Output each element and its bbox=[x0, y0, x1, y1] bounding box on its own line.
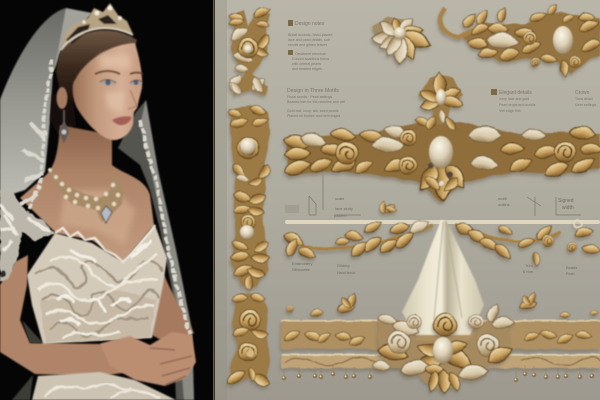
text block: middle right notes: Tiara detail bbox=[575, 97, 593, 101]
text block: top notes: Curved acanthus forms bbox=[292, 57, 329, 61]
text block: middle right notes: Ivory lace and gold bbox=[499, 97, 529, 101]
face highlights bbox=[100, 55, 130, 112]
panel: bride portrait bbox=[0, 0, 214, 400]
right arm bbox=[152, 272, 194, 345]
text block: top notes: and beaded edges bbox=[292, 67, 322, 71]
ornament: small sprig between notes bbox=[379, 202, 398, 215]
eyes, brows, lips and nose bbox=[95, 71, 143, 125]
text block: middle right notes: Crown bbox=[575, 90, 590, 96]
small diagram sketches bbox=[309, 175, 581, 216]
ornament: central medallion bbox=[418, 72, 464, 124]
text block: lower captions: Hand finish bbox=[337, 271, 355, 275]
text block: middle right notes: Elegant details bbox=[499, 90, 532, 96]
pearls set into the ornaments bbox=[240, 26, 573, 363]
veil lace trim bbox=[18, 60, 190, 335]
text block: middle left notes: Placed on bodice and hem edges bbox=[287, 114, 341, 118]
ornament: garlands under the rail bbox=[282, 218, 600, 266]
text block: middle right notes: Pearl drops and scrolls bbox=[499, 103, 536, 107]
text block: lower captions: outline bbox=[498, 202, 511, 207]
text block: lower captions bbox=[285, 196, 577, 276]
ornament: lower ribbon bands bbox=[281, 291, 600, 368]
drapery bbox=[402, 220, 484, 335]
shoulder lace bbox=[0, 190, 55, 282]
text block: middle left notes: Gold leaf, ivory, silk, seed pearls bbox=[287, 109, 339, 113]
text block: lower captions: scale bbox=[335, 196, 345, 201]
ornament: small top brooch bbox=[371, 15, 434, 65]
text block: middle right notes bbox=[491, 89, 596, 113]
text block: top notes: Ornament structure bbox=[295, 52, 326, 56]
text block: lower captions: Silhouette bbox=[292, 267, 311, 272]
ornament: cream rail bbox=[285, 220, 600, 224]
ornament: central horizontal band bbox=[283, 114, 600, 202]
tiara bbox=[61, 3, 133, 50]
text block: top notes: Bridal accents, hand-placed bbox=[288, 33, 332, 37]
text block: middle left notes: Design in Three Motifs bbox=[287, 88, 339, 94]
necklace bbox=[48, 168, 124, 223]
text block: middle right notes: Veil edge trim bbox=[499, 109, 521, 113]
veil behind arm bbox=[12, 320, 43, 400]
text block: lower captions: Embroidery bbox=[292, 261, 312, 266]
text block: lower captions: motif bbox=[498, 196, 508, 201]
text block: lower captions: lace study bbox=[335, 206, 353, 211]
veil bbox=[0, 8, 194, 400]
text block: top notes: lace and pearl details, soft bbox=[288, 38, 330, 42]
text block: lower captions: pattern bbox=[334, 213, 346, 218]
text block: lower captions: Pearl bbox=[566, 272, 575, 276]
panel: ornament sheet background bbox=[215, 0, 600, 400]
face bbox=[73, 43, 142, 140]
collarbone highlight bbox=[60, 190, 135, 245]
text block: lower captions: width bbox=[562, 205, 574, 211]
text block: lower captions: 6 mm bbox=[523, 269, 534, 274]
text block: top notes: with central pearls bbox=[292, 62, 321, 66]
dress bodice bbox=[27, 225, 167, 344]
ornament: hanging beads bbox=[282, 365, 594, 382]
text block: top notes bbox=[288, 20, 332, 71]
text block: middle left notes: Beaded trim for the neckline and veil bbox=[287, 100, 345, 104]
ornament: left column top bbox=[226, 5, 272, 97]
hair bbox=[56, 30, 137, 102]
text block: lower captions: Signed bbox=[558, 198, 574, 204]
text block: middle left notes bbox=[287, 88, 345, 118]
text block: lower captions: Trim bbox=[525, 263, 534, 268]
text block: top notes: Design notes bbox=[295, 21, 325, 27]
text block: middle right notes: Gem settings bbox=[575, 103, 596, 107]
ornament: top right flourish bbox=[440, 3, 600, 77]
earring bbox=[59, 110, 69, 143]
neck and shoulders bbox=[20, 125, 154, 262]
hands bbox=[100, 332, 196, 386]
text block: lower captions: Beads bbox=[566, 265, 577, 270]
text block: top notes: scrolls and gilded leaves bbox=[288, 43, 327, 47]
ornament: lower central flourish bbox=[371, 301, 515, 394]
ornament: left column bottom bbox=[225, 293, 272, 389]
text block: middle left notes: Floral scrolls · Pearl settings bbox=[287, 95, 332, 99]
dress skirt bbox=[32, 372, 176, 400]
left arm bbox=[0, 255, 130, 376]
text block: lower captions: Gilding bbox=[337, 263, 349, 268]
ornament: left column middle bbox=[227, 103, 272, 290]
ear bbox=[56, 87, 68, 109]
back hair bbox=[50, 90, 76, 135]
